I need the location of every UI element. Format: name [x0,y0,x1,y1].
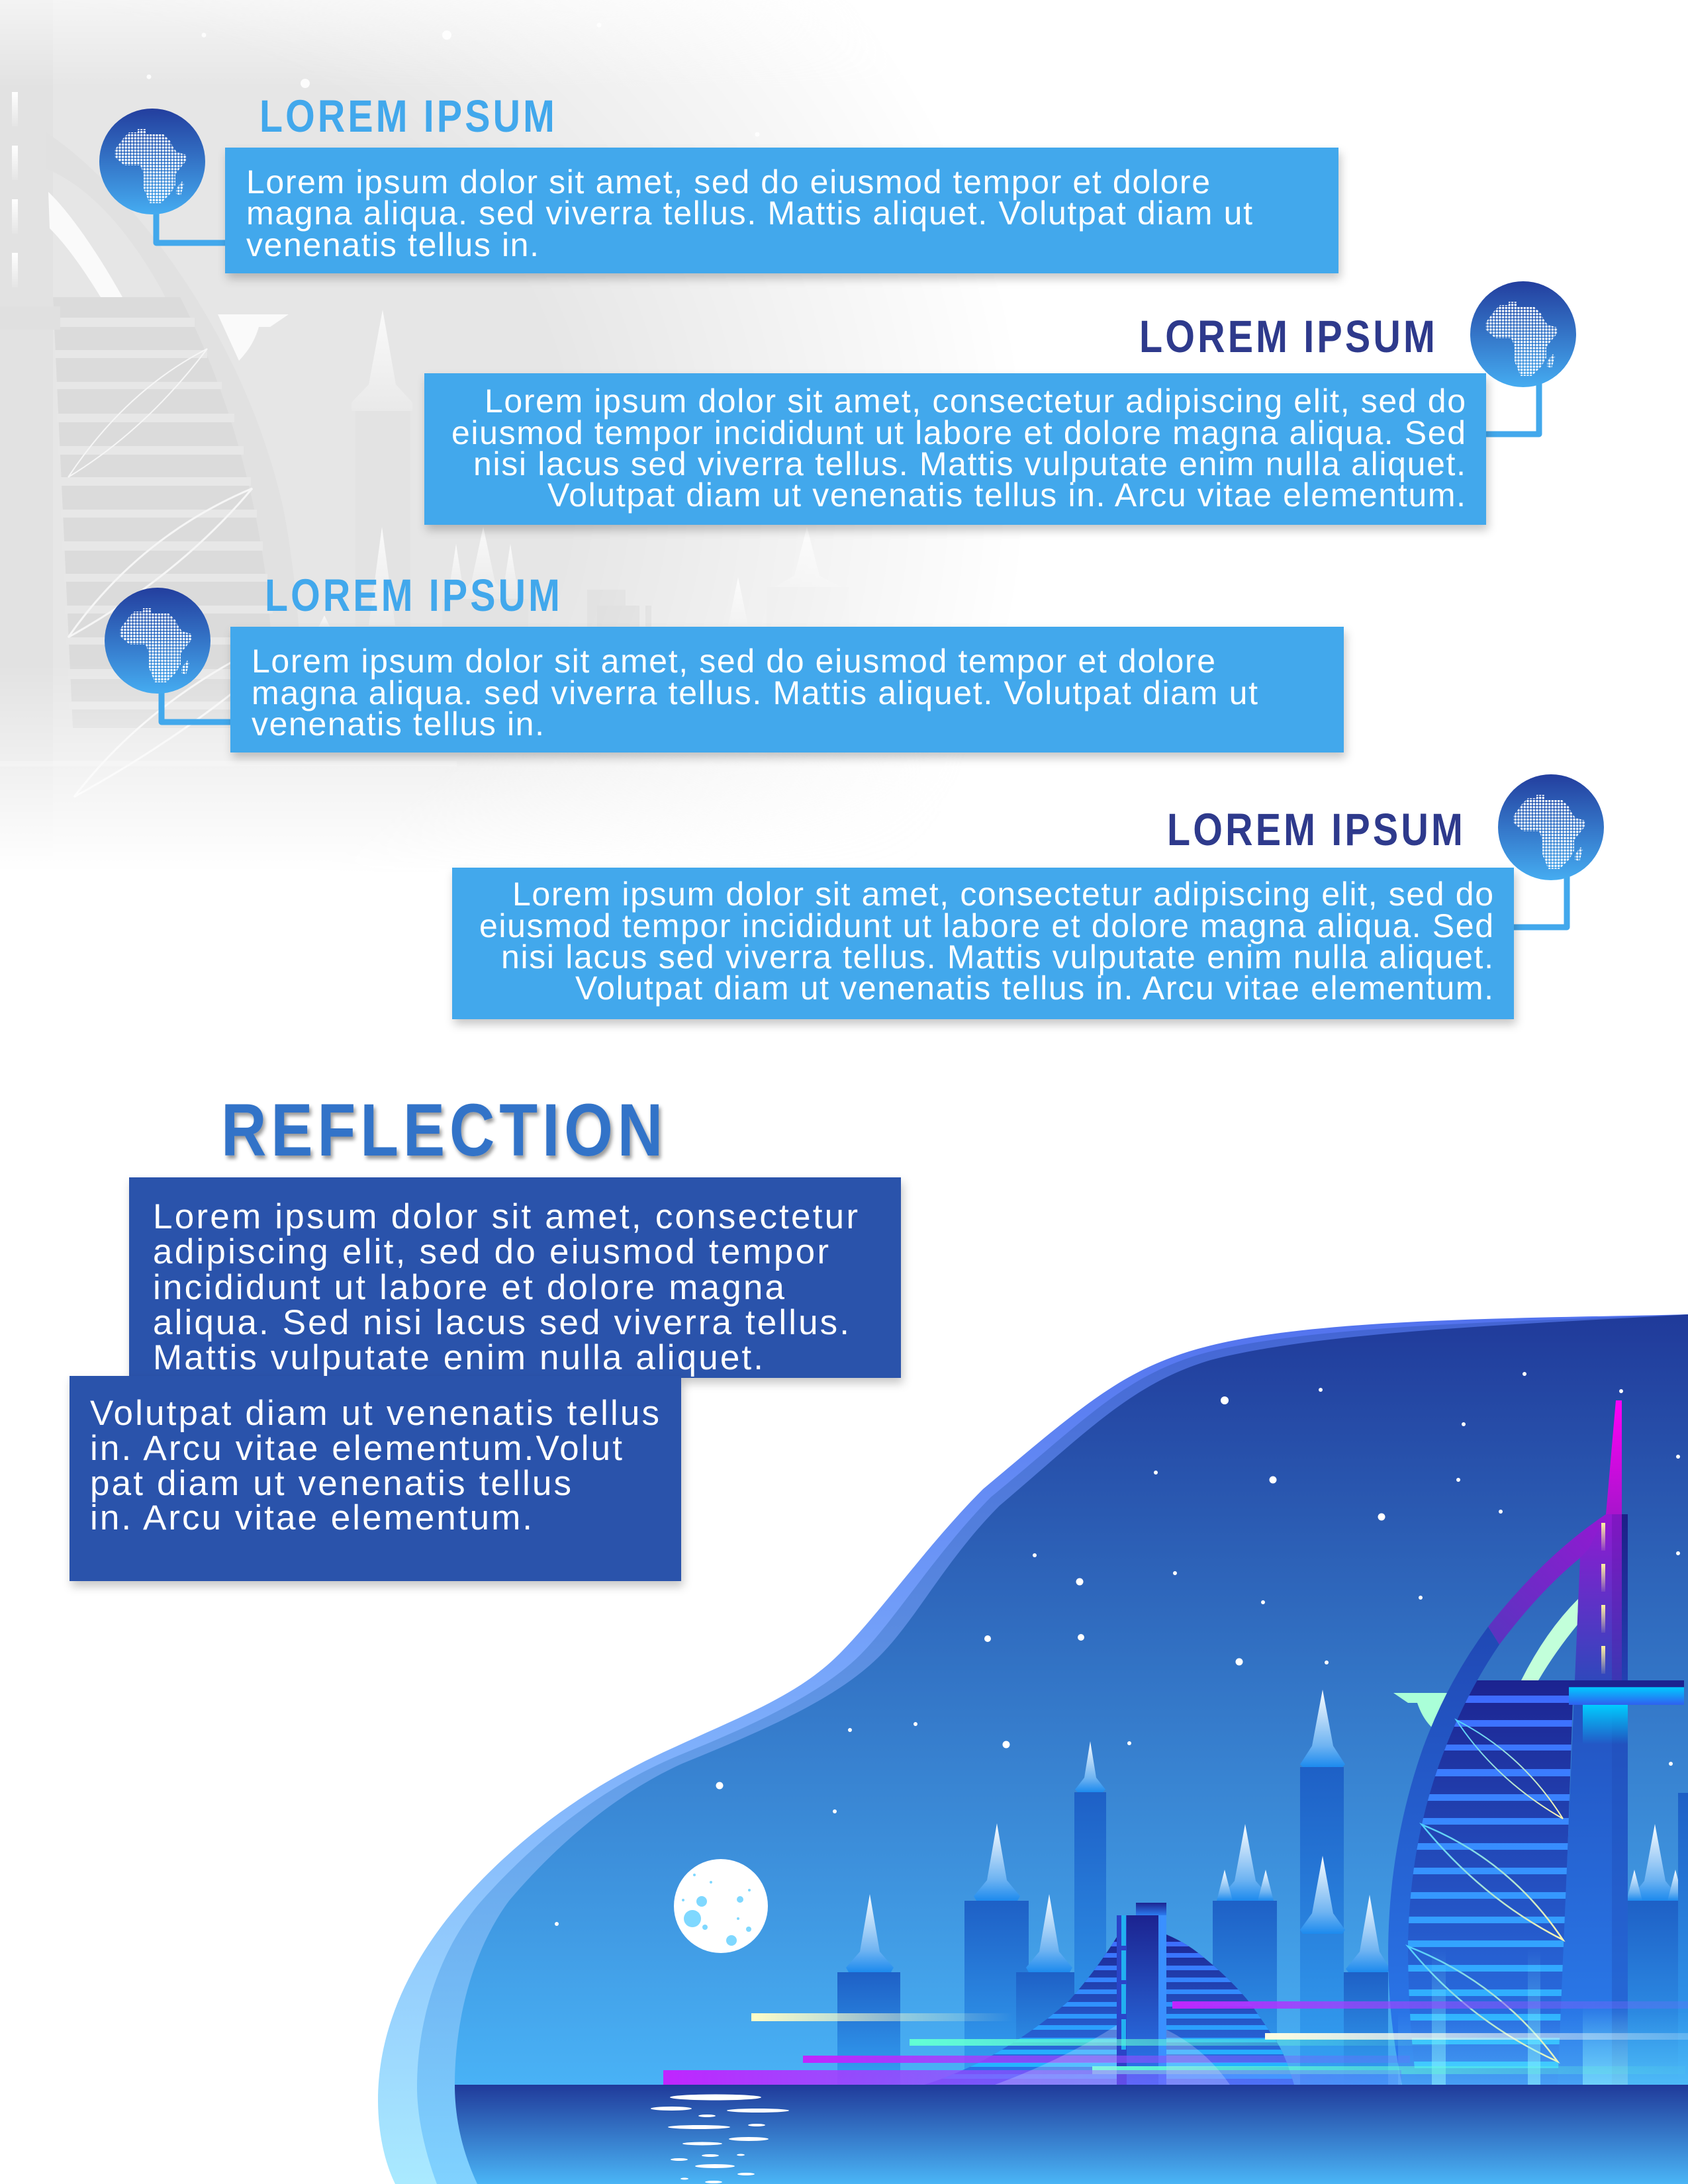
main sail hotel [1388,1400,1688,2085]
moon reflection on water [651,2094,789,2183]
reflection box A: adipiscing elit, sed do eiusmod tempor [153,1232,829,1271]
section 1 [99,91,1338,273]
icon: Africa dots 3 [105,588,211,694]
background: faded grey city [0,0,873,813]
text box 2 [424,373,1486,525]
reflection box B: in. Arcu vitae elementum.Volut [90,1429,622,1468]
heading 4: LOREM IPSUM [1167,804,1466,855]
text box 1 [225,148,1338,273]
text box 2: eiusmod tempor incididunt ut labore et dolore magna aliqua. Sed [451,414,1466,451]
text box 3: venenatis tellus in. [252,705,544,743]
text box 1: Lorem ipsum dolor sit amet, sed do eiusmod tempor et dolore [246,163,1210,201]
text box 1: magna aliqua. sed viverra tellus. Mattis aliquet. Volutpat diam ut [246,195,1252,232]
heading 2: LOREM IPSUM [1139,311,1438,362]
text box 3: Lorem ipsum dolor sit amet, sed do eiusmod tempor et dolore [252,643,1215,680]
icon: Africa dots 2 [1470,281,1576,387]
text box 4 [452,868,1514,1019]
text box 4: eiusmod tempor incididunt ut labore et dolore magna aliqua. Sed [479,907,1493,944]
illustration: night city blob [378,1314,1688,2184]
reflection box B: pat diam ut venenatis tellus [90,1464,571,1503]
reflection box B: Volutpat diam ut venenatis tellus [90,1394,659,1433]
reflection box A: incididunt ut labore et dolore magna [153,1268,785,1307]
connector 1 [156,212,228,243]
reflection box A: aliqua. Sed nisi lacus sed viverra tellus. [153,1303,849,1342]
heading 1: LOREM IPSUM [259,91,557,142]
reflection box A: Lorem ipsum dolor sit amet, consectetur [153,1197,858,1236]
small sail building [920,1903,1297,2085]
blob outer layer [378,1314,1688,2184]
icon: Africa dots 1 [99,109,205,214]
text box 3: magna aliqua. sed viverra tellus. Mattis aliquet. Volutpat diam ut [252,674,1258,711]
reflection box A: Mattis vulputate enim nulla aliquet. [153,1338,763,1377]
reflection box A [129,1177,901,1378]
stars [555,1372,1680,1926]
text box 2: Volutpat diam ut venenatis tellus in. Arcu vitae elementum. [547,477,1466,514]
heading 3: LOREM IPSUM [265,570,563,621]
text box 1: venenatis tellus in. [246,226,539,263]
connector 4 [1511,874,1567,927]
heading: reflection: REFLECTION [221,1089,667,1171]
connector 3 [162,691,234,722]
text box 2: nisi lacus sed viverra tellus. Mattis vulputate enim nulla aliquet. [473,445,1466,482]
skyline towers [837,1690,1688,2085]
text box 4: Volutpat diam ut venenatis tellus in. Arcu vitae elementum. [575,970,1493,1007]
section 4 [452,774,1604,1019]
reflection box B [70,1376,681,1581]
dome light overlay [995,2025,1230,2085]
icon: Africa dots 4 [1498,774,1604,880]
text box 3 [230,627,1344,752]
connector 2 [1483,381,1539,434]
section 3 [105,570,1344,752]
section 2 [424,281,1576,525]
text box 4: nisi lacus sed viverra tellus. Mattis vulputate enim nulla aliquet. [501,938,1493,976]
text box 2: Lorem ipsum dolor sit amet, consectetur adipiscing elit, sed do [485,383,1466,420]
moon [674,1859,768,1953]
water [455,2085,1688,2184]
text box 4: Lorem ipsum dolor sit amet, consectetur adipiscing elit, sed do [512,876,1493,913]
sky [455,1314,1688,2085]
reflection box B: in. Arcu vitae elementum. [90,1498,532,1537]
light streaks [663,2001,1688,2085]
blob middle layer [417,1314,1688,2184]
